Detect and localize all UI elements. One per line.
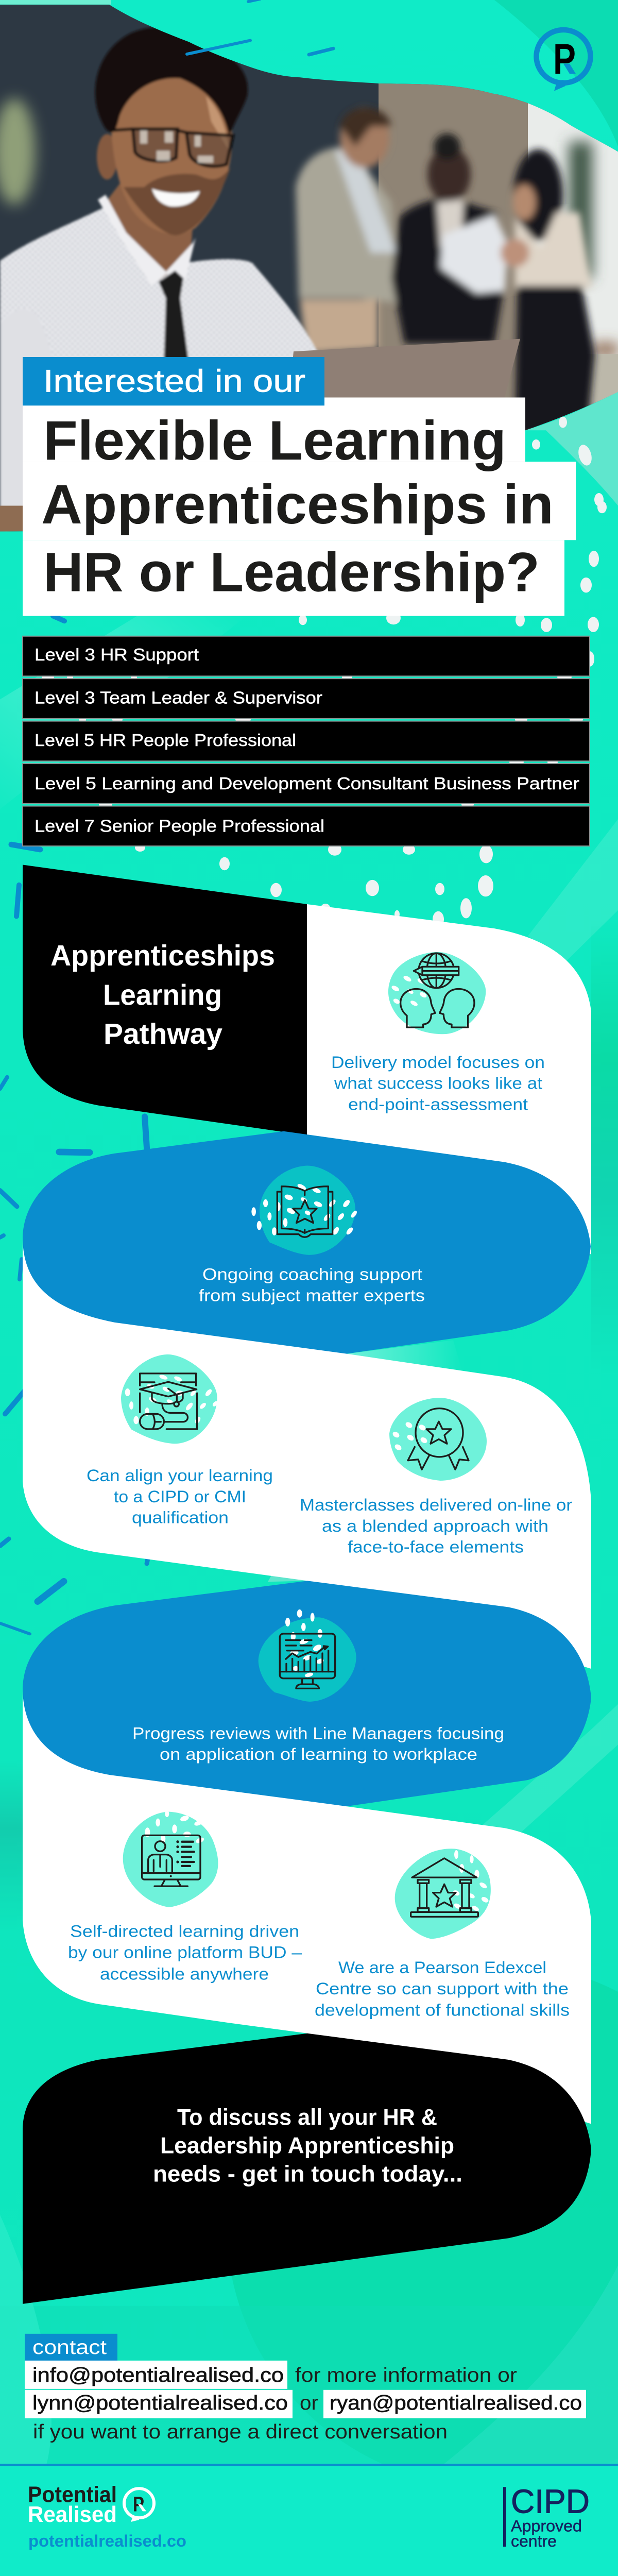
apprenticeship level list (23, 636, 590, 846)
background colleagues (296, 107, 595, 435)
apprenticeship level list: Level 7 Senior People Professional (35, 817, 324, 836)
icon: heads and globe (388, 952, 486, 1034)
panel: call to action: needs - get in touch today... (153, 2162, 462, 2187)
step: masterclasses: face-to-face elements (348, 1537, 524, 1556)
step: progress reviews (blue panel): on application of learning to workplace (160, 1744, 477, 1764)
title heading: Apprenticeships in (41, 473, 554, 536)
panel: call to action: Leadership Apprenticeship (160, 2133, 454, 2158)
step: Pearson Edexcel centre: We are a Pearson Edexcel (338, 1958, 546, 1977)
panel: pathway heading (23, 865, 307, 1136)
laptop (293, 339, 520, 398)
contact block: if you want to arrange a direct conversation (33, 2420, 448, 2443)
contact block: for more information or (295, 2364, 517, 2386)
step: self-directed learning: Self-directed learning driven (70, 1922, 299, 1940)
step: ongoing coaching (blue panel): Ongoing coaching support (202, 1265, 422, 1283)
step: CIPD or CMI qualification: to a CIPD or CMI (114, 1487, 246, 1506)
icon: monitor with chart (259, 1609, 356, 1702)
step: self-directed learning (68, 1810, 302, 1984)
logo: Potential Realised: P (133, 2492, 144, 2516)
white speckle dots (42, 417, 607, 927)
contact block: info@potentialrealised.co (32, 2364, 284, 2386)
title heading (23, 397, 576, 616)
logo: CIPD approved centre (503, 2483, 590, 2550)
panel: pathway heading: Pathway (104, 1018, 222, 1050)
logo: CIPD approved centre: Approved (511, 2517, 582, 2535)
step: Pearson Edexcel centre (315, 1849, 570, 2019)
footer divider (0, 2464, 618, 2466)
step: masterclasses: Masterclasses delivered on-line or (300, 1495, 572, 1514)
step: ongoing coaching (blue panel) (23, 1131, 591, 1354)
man (0, 27, 320, 526)
step: CIPD or CMI qualification (87, 1354, 273, 1527)
panel: white pathway step, top right (307, 904, 591, 1254)
logo: top right P badge: P (553, 35, 576, 83)
step: CIPD or CMI qualification: qualification (132, 1508, 229, 1527)
title label: Interested in our: Interested in our (43, 364, 305, 399)
apprenticeship level list: Level 3 Team Leader & Supervisor (35, 689, 322, 707)
apprenticeship level list: Level 3 HR Support (35, 646, 199, 665)
step: delivery model: end-point-assessment (348, 1095, 528, 1113)
contact block: ryan@potentialrealised.co (330, 2392, 582, 2414)
step: progress reviews (blue panel): Progress reviews with Line Managers focusing (132, 1724, 504, 1742)
icon: institution with star (395, 1849, 491, 1939)
contact block: lynn@potentialrealised.co (32, 2392, 288, 2414)
contact block: or (300, 2392, 318, 2414)
step: masterclasses (300, 1398, 572, 1556)
logo: Potential Realised: Potential (28, 2483, 117, 2507)
step: delivery model (331, 952, 545, 1113)
icon: online presenter monitor (123, 1810, 218, 1907)
step: self-directed learning: by our online platform BUD – (68, 1943, 302, 1961)
logo: Potential Realised: potentialrealised.co (28, 2531, 186, 2550)
icon: book with star (251, 1165, 358, 1255)
contact block: contact (32, 2336, 107, 2359)
logo: Potential Realised: Realised (28, 2502, 117, 2527)
panel: call to action (23, 2033, 591, 2304)
step: self-directed learning: accessible anywhere (100, 1964, 269, 1984)
step: Pearson Edexcel centre: development of functional skills (315, 2001, 570, 2019)
step: CIPD or CMI qualification: Can align your learning (87, 1466, 273, 1485)
step: masterclasses: as a blended approach with (322, 1516, 548, 1535)
contact block (25, 2334, 586, 2443)
icon: award rosette (389, 1398, 487, 1481)
panel: white pathway steps, middle (23, 1237, 591, 1669)
title (23, 357, 576, 616)
step: delivery model: what success looks like at (334, 1074, 542, 1092)
photo: smiling man with colleagues behind (0, 0, 618, 536)
title heading: Flexible Learning (43, 410, 506, 472)
blue brush dashes (0, 0, 333, 1634)
step: progress reviews (blue panel) (23, 1581, 591, 1806)
logo: CIPD approved centre: centre (511, 2532, 557, 2550)
panel: pathway heading: Learning (103, 979, 222, 1011)
step: Pearson Edexcel centre: Centre so can support with the (316, 1979, 569, 1998)
apprenticeship level list: Level 5 Learning and Development Consultant Business Partner (35, 774, 579, 793)
step: delivery model: Delivery model focuses on (331, 1053, 545, 1072)
panel: pathway heading: Apprenticeships (50, 939, 275, 972)
panel: white pathway steps, lower (23, 1688, 591, 2124)
logo: Potential Realised (28, 2483, 186, 2550)
title label: Interested in our (23, 357, 324, 405)
logo: top right P badge (537, 30, 590, 91)
icon: mortarboard and mouse (121, 1354, 218, 1444)
apprenticeship level list: Level 5 HR People Professional (35, 731, 296, 750)
title heading: HR or Leadership? (43, 541, 540, 603)
panel: call to action: To discuss all your HR & (177, 2105, 437, 2130)
logo: CIPD approved centre: CIPD (511, 2483, 590, 2520)
step: ongoing coaching (blue panel): from subject matter experts (199, 1286, 425, 1304)
